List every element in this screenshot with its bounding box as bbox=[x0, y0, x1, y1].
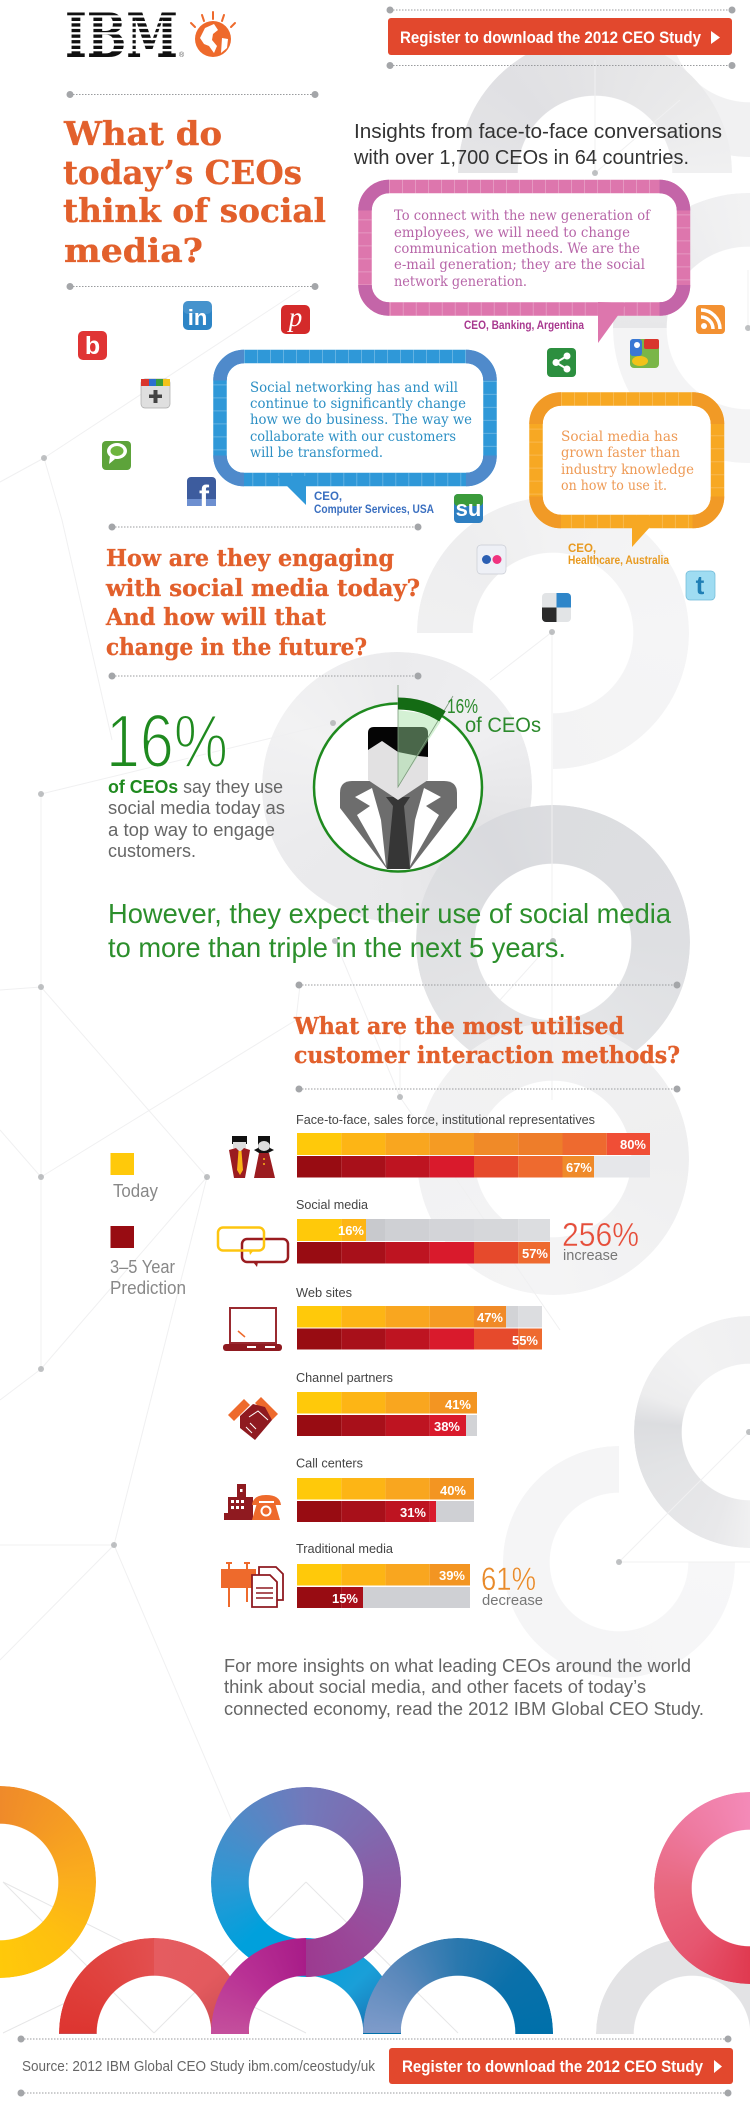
icon: twitter: t bbox=[696, 570, 705, 600]
ring: behind top bars bbox=[417, 1023, 689, 1295]
row: call centers bbox=[296, 1456, 474, 1522]
gauge label: of CEOs bbox=[465, 714, 541, 737]
intro text bbox=[353, 120, 722, 169]
speech bubble: blue: Social networking has and will bbox=[250, 380, 458, 396]
divider under title bbox=[66, 283, 318, 290]
speech bubble: orange: Healthcare, Australia bbox=[568, 555, 670, 567]
gauge label: 16% bbox=[447, 696, 478, 718]
divider above footer bbox=[18, 2036, 732, 2042]
icon: share bbox=[547, 348, 576, 377]
callout: 256 percent increase: 256% bbox=[562, 1216, 639, 1253]
row: web sites: 47% bbox=[477, 1310, 503, 1325]
speech bubble: pink: employees, we will need to change bbox=[394, 225, 630, 241]
stat: 16 percent: 16% bbox=[106, 699, 228, 783]
row: web sites: Web sites bbox=[296, 1286, 352, 1300]
speech bubble: blue: CEO, bbox=[314, 491, 342, 503]
speech bubble: pink: To connect with the new generation of bbox=[394, 208, 651, 224]
jacket bbox=[340, 781, 457, 869]
legend: Today bbox=[113, 1181, 158, 1201]
intro text: Insights from face-to-face conversations bbox=[354, 120, 722, 143]
source line: Source: 2012 IBM Global CEO Study ibm.com/ceostudy/uk bbox=[22, 2058, 375, 2075]
speech bubble: blue: will be transformed. bbox=[250, 445, 383, 461]
speech bubble: blue: collaborate with our customers bbox=[250, 429, 456, 445]
ring: magenta arch bbox=[211, 1938, 401, 2034]
icon: face-to-face people bbox=[229, 1136, 275, 1178]
ring: right of pink bubble bbox=[613, 193, 750, 463]
background: pale grey rings bbox=[262, 55, 750, 1678]
speech bubble: blue: Computer Services, USA bbox=[314, 504, 434, 516]
row: traditional media bbox=[296, 1542, 470, 1608]
row: channel partners: 41% bbox=[445, 1397, 471, 1412]
heading: interaction methods: What are the most utilised bbox=[293, 1013, 624, 1040]
however statement bbox=[108, 898, 671, 963]
face bbox=[368, 741, 428, 800]
icon: google bookmarks bbox=[630, 339, 659, 368]
title: media? bbox=[64, 231, 203, 270]
row: call centers: 31% bbox=[400, 1505, 426, 1520]
button: register top bbox=[388, 18, 732, 55]
row: social media: 16% bbox=[338, 1223, 364, 1238]
however statement: to more than triple in the next 5 years. bbox=[108, 932, 566, 963]
button: register bottom bbox=[389, 2048, 733, 2084]
row: web sites: 55% bbox=[512, 1333, 538, 1348]
legend bbox=[110, 1153, 186, 1298]
ring: pink bbox=[654, 1792, 750, 1984]
intro text: with over 1,700 CEOs in 64 countries. bbox=[353, 146, 689, 169]
ring: orange yellow bbox=[0, 1786, 96, 1978]
button: register bottom: Register to download the 2012 CEO Study bbox=[402, 2057, 703, 2076]
icon: call center bbox=[224, 1484, 281, 1520]
divider under heading two bbox=[108, 672, 422, 680]
ring: blue arch bbox=[363, 1938, 553, 2034]
row: social media: Social media bbox=[296, 1198, 368, 1212]
speech bubble: orange: Social media has bbox=[561, 429, 678, 445]
callout: 61 percent decrease: 61% bbox=[481, 1561, 536, 1597]
ring: behind CEO figure bbox=[262, 652, 532, 922]
row: face-to-face: Face-to-face, sales force, institutional representatives bbox=[296, 1113, 595, 1127]
speech bubble: pink: e-mail generation; they are the social bbox=[394, 257, 645, 273]
icon: stumbleupon: su bbox=[456, 496, 481, 521]
divider above heading two bbox=[108, 524, 422, 530]
icon: linkedin: in bbox=[188, 305, 207, 330]
icon: linkedin bbox=[183, 301, 212, 330]
closing text: For more insights on what leading CEOs around the world bbox=[224, 1656, 691, 1676]
ring: behind however statement bbox=[416, 805, 690, 1051]
speech bubble: orange: grown faster than bbox=[561, 445, 680, 461]
ring: pale grey arch bbox=[596, 1940, 750, 2034]
ring: blue purple bbox=[211, 1787, 401, 1977]
callout: 256 percent increase: increase bbox=[563, 1247, 618, 1264]
icon: flickr bbox=[477, 545, 506, 574]
speech bubble: orange: CEO, bbox=[568, 543, 596, 555]
icon: chat bubbles bbox=[218, 1228, 288, 1267]
legend: Prediction bbox=[110, 1278, 186, 1298]
icon: delicious bbox=[542, 593, 571, 622]
icon: handshake bbox=[228, 1397, 278, 1440]
gauge wedge bbox=[398, 710, 441, 787]
icon: twitter bbox=[686, 570, 715, 600]
row: channel partners: 38% bbox=[434, 1419, 460, 1434]
stat description: social media today as bbox=[108, 797, 285, 818]
heading: engagement question: How are they engaging bbox=[106, 545, 394, 572]
speech bubble: blue: continue to significantly change bbox=[250, 396, 466, 412]
icon: rss bbox=[696, 305, 725, 334]
row: channel partners bbox=[296, 1371, 477, 1436]
heading: interaction methods bbox=[293, 1013, 680, 1069]
icon: smarter planet globe bbox=[191, 12, 235, 57]
callout: 61 percent decrease: decrease bbox=[482, 1593, 543, 1609]
row: traditional media: 39% bbox=[439, 1568, 465, 1583]
ring: top right bbox=[665, 55, 750, 157]
closing text: connected economy, read the 2012 IBM Global CEO Study. bbox=[224, 1699, 704, 1719]
lapels bbox=[355, 788, 441, 866]
row: call centers: 40% bbox=[440, 1483, 466, 1498]
IBM logo: ® bbox=[179, 51, 185, 59]
icon: facebook: f bbox=[199, 480, 210, 513]
divider above heading three bbox=[296, 982, 680, 988]
bottom coloured rings bbox=[0, 1786, 750, 2034]
title: today’s CEOs bbox=[63, 153, 302, 192]
icon: bebo: b bbox=[85, 332, 100, 360]
stat description: customers. bbox=[108, 840, 196, 861]
row: traditional media: Traditional media bbox=[296, 1542, 393, 1556]
ring: behind intro text bbox=[458, 55, 732, 173]
row: social media bbox=[296, 1198, 550, 1264]
icon: pinterest bbox=[281, 302, 310, 334]
heading: engagement question: with social media today? bbox=[105, 575, 420, 602]
however statement: However, they expect their use of social media bbox=[108, 898, 671, 929]
tie bbox=[386, 797, 410, 869]
speech bubble: orange bbox=[536, 399, 718, 567]
stat description bbox=[108, 776, 285, 861]
divider under heading three bbox=[296, 1086, 680, 1092]
ring: behind heading two bbox=[417, 497, 689, 769]
stat description: a top way to engage bbox=[108, 819, 275, 840]
speech bubble: orange: on how to use it. bbox=[561, 478, 667, 494]
ring: red arch bbox=[59, 1938, 249, 2034]
stat description: of CEOs say they use bbox=[108, 776, 283, 797]
speech bubble: blue bbox=[220, 356, 490, 516]
top divider bbox=[386, 6, 736, 14]
row: face-to-face bbox=[296, 1113, 650, 1178]
heading: engagement question: change in the future? bbox=[106, 634, 367, 661]
IBM logo: IBM bbox=[65, 1, 178, 72]
icon: technorati bbox=[102, 441, 131, 470]
heading: engagement question: And how will that bbox=[105, 604, 326, 631]
icon: bebo bbox=[78, 331, 107, 360]
gauge arc bbox=[398, 704, 442, 716]
speech bubble: orange: industry knowledge bbox=[561, 462, 694, 478]
ring: blue purple overlap bbox=[306, 1787, 401, 1977]
speech bubble: blue: how we do business. The way we bbox=[250, 412, 472, 428]
ring: behind decrease text bbox=[503, 1446, 735, 1678]
speech bubble: pink: communication methods. We are the bbox=[394, 241, 640, 257]
icon: billboard and documents bbox=[221, 1563, 283, 1607]
icon: pinterest: p bbox=[287, 302, 302, 332]
CEO figure with 16 percent gauge bbox=[314, 685, 482, 872]
row: traditional media: 15% bbox=[332, 1591, 358, 1606]
row: social media: 57% bbox=[522, 1246, 548, 1261]
speech bubble: pink: CEO, Banking, Argentina bbox=[464, 320, 585, 332]
ring: lower right bbox=[634, 1316, 750, 1548]
heading: interaction methods: customer interaction methods? bbox=[294, 1042, 680, 1069]
row: web sites bbox=[296, 1286, 542, 1350]
icon: facebook bbox=[187, 477, 216, 513]
row: face-to-face: 80% bbox=[620, 1137, 646, 1152]
icon: google plus bbox=[141, 379, 170, 408]
title: think of social bbox=[63, 191, 326, 230]
gauge label bbox=[447, 696, 541, 737]
speech bubble: pink bbox=[365, 186, 684, 343]
title: What do bbox=[63, 114, 222, 153]
speech bubble: pink: network generation. bbox=[394, 274, 527, 290]
heading: engagement question bbox=[105, 545, 420, 661]
legend: 3–5 Year bbox=[110, 1257, 175, 1277]
icon: laptop bbox=[223, 1308, 282, 1351]
button: register top: Register to download the 2012 CEO Study bbox=[400, 28, 701, 47]
closing text bbox=[224, 1656, 704, 1719]
hair bbox=[368, 727, 428, 757]
row: face-to-face: 67% bbox=[566, 1160, 592, 1175]
divider below footer bbox=[18, 2090, 732, 2096]
closing text: think about social media, and other facets of today’s bbox=[224, 1677, 646, 1697]
divider under button bbox=[386, 62, 736, 69]
divider above title bbox=[66, 91, 318, 98]
row: channel partners: Channel partners bbox=[296, 1371, 393, 1385]
title bbox=[63, 114, 326, 270]
row: call centers: Call centers bbox=[296, 1456, 363, 1470]
